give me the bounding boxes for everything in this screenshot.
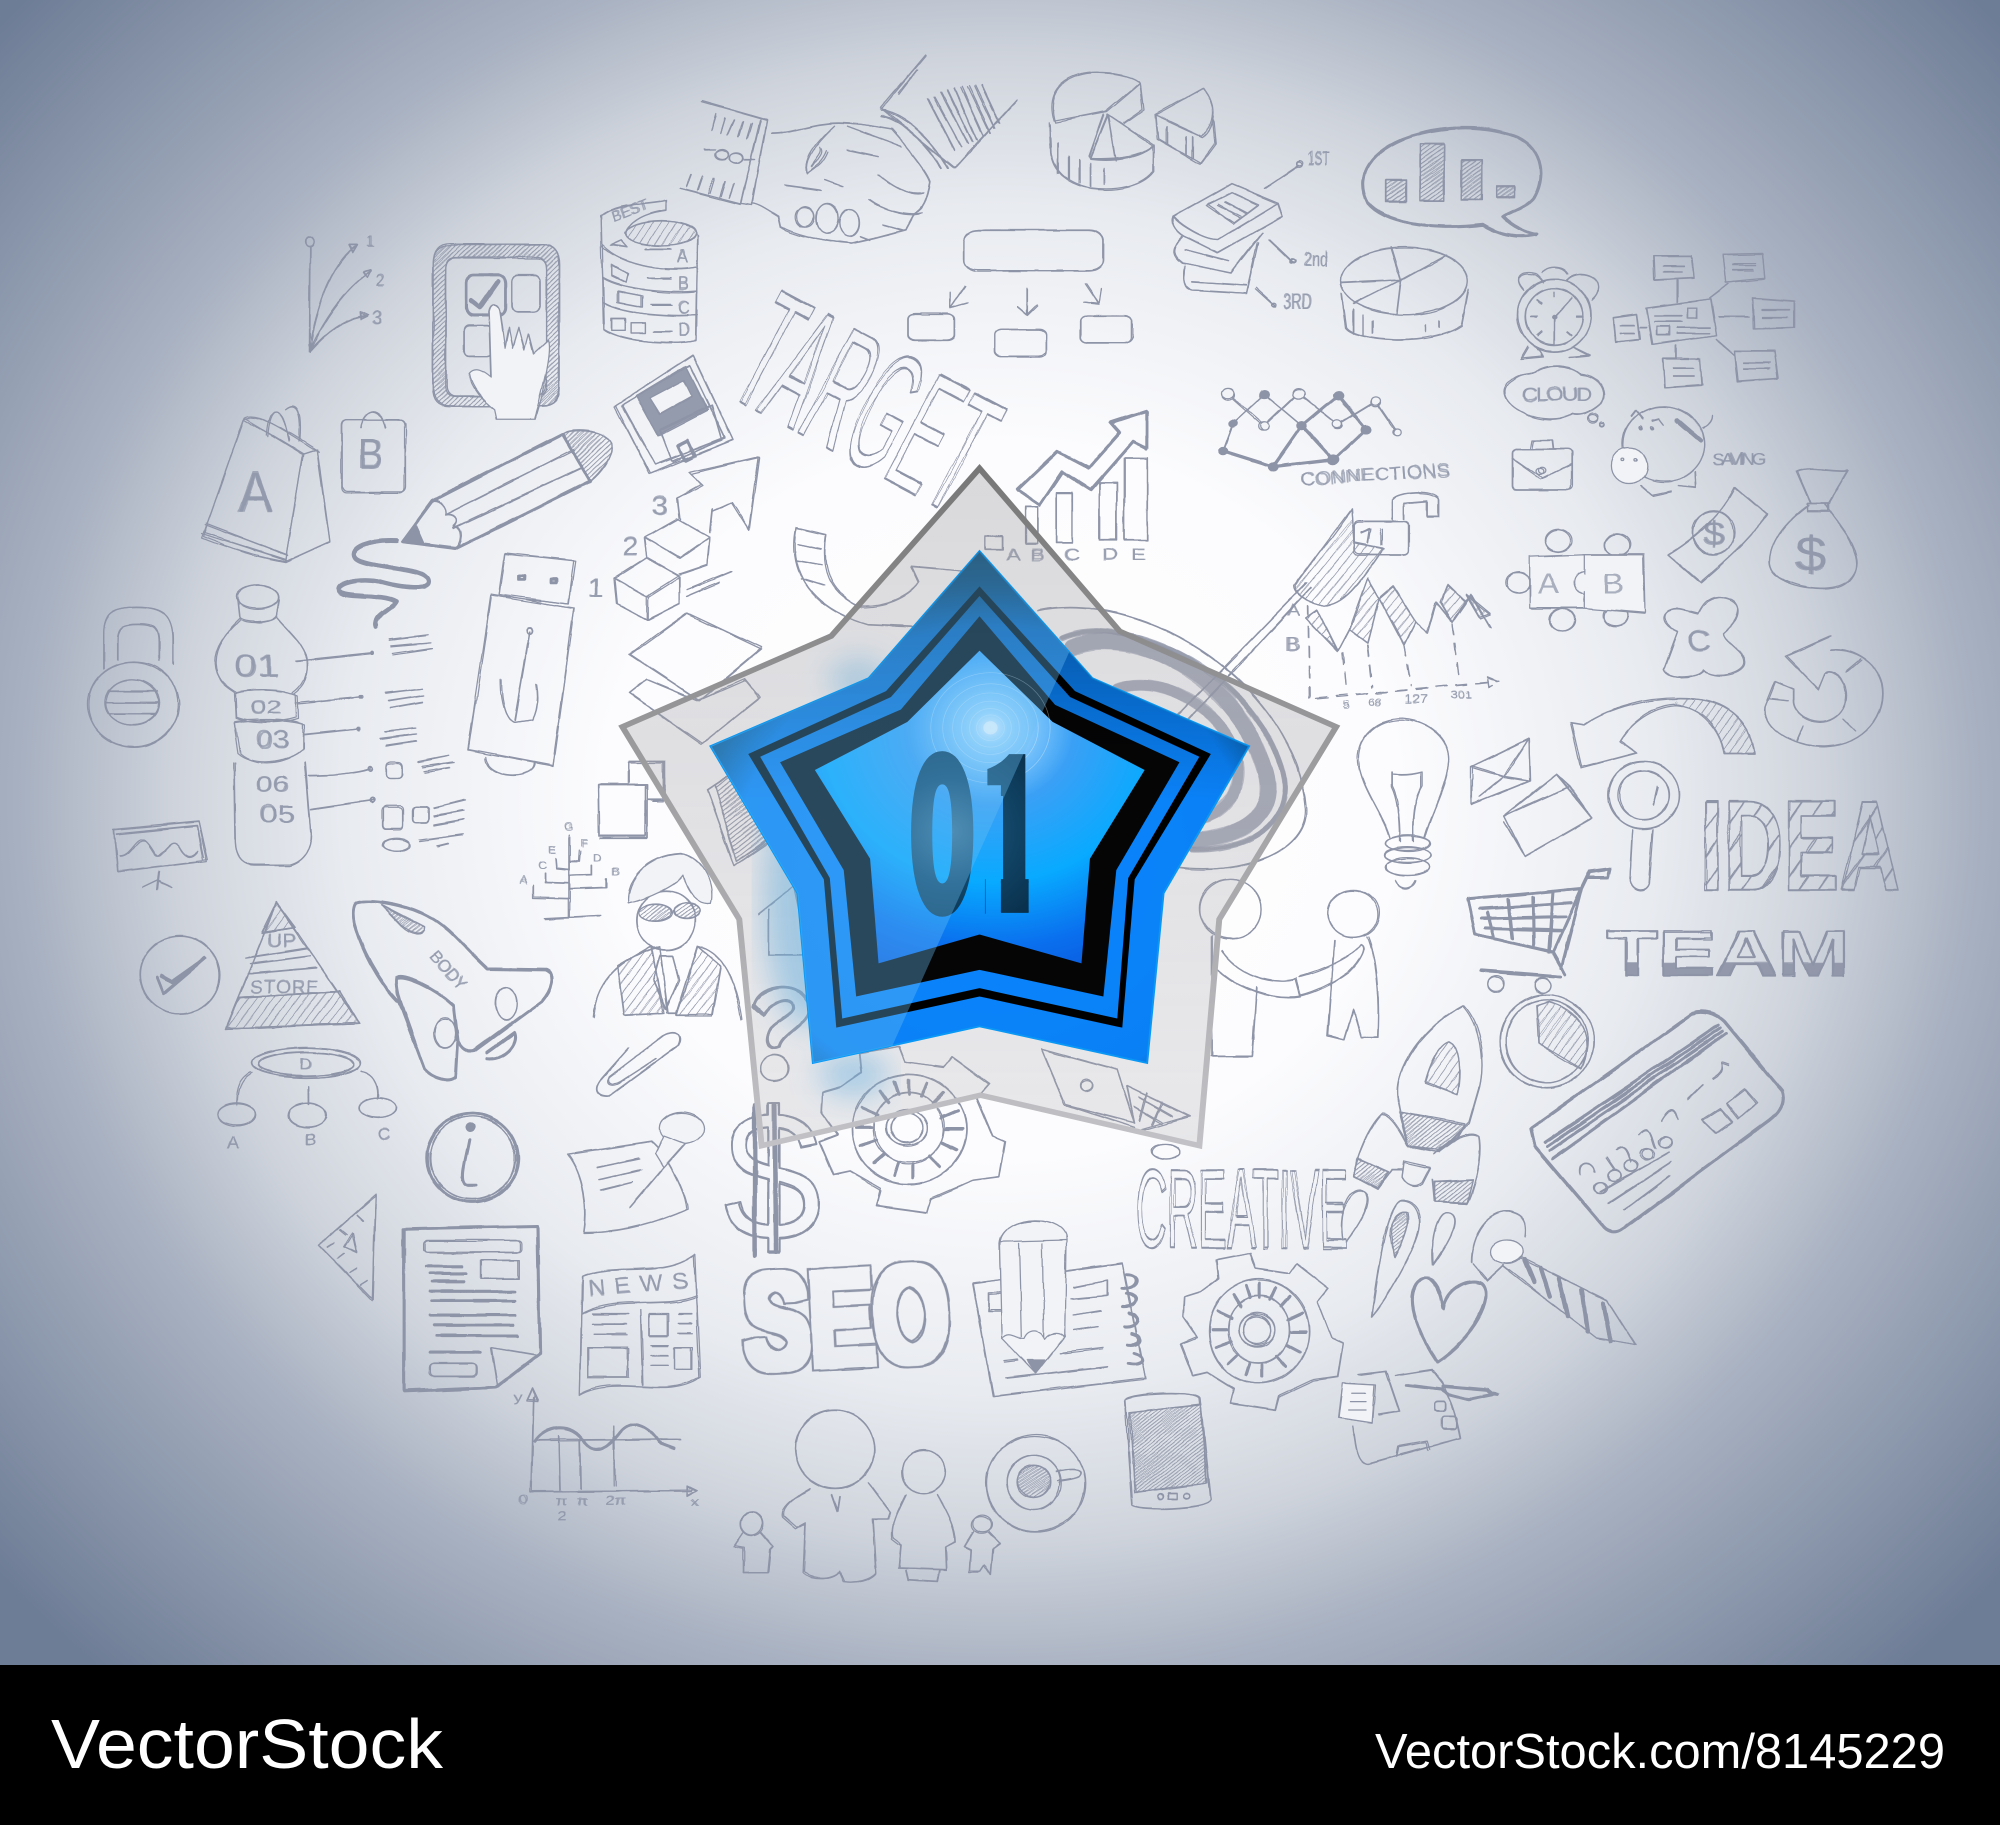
chart: connections network — [1219, 389, 1452, 490]
icon: branching arrows 1 2 3: 1 — [367, 232, 375, 251]
chart: area lines with axis: 127 — [1404, 692, 1427, 706]
star top shading — [710, 551, 1249, 780]
doodles traced lower middle — [513, 1105, 1145, 1582]
icon: envelopes — [1471, 738, 1592, 857]
chart: rising arrow with bars: C — [1064, 546, 1080, 564]
icon: dollar bill — [1668, 487, 1767, 582]
icon: best database list — [601, 195, 698, 343]
chart: sine graph: π — [576, 1494, 588, 1508]
diagram: node D with A B C — [218, 1048, 397, 1153]
icon: stair steps with arrow: 2 — [622, 532, 638, 561]
diagram: node D with A B C: B — [304, 1130, 317, 1150]
icon: puzzle pieces: A — [1538, 568, 1560, 600]
icon: best database list: A — [677, 246, 688, 267]
icon: smartphone — [1125, 1393, 1211, 1509]
icon: rocket — [1353, 1006, 1482, 1203]
icon: ribbon arrow — [795, 528, 966, 627]
chart: connections network: CONNECTIONS — [1300, 461, 1452, 490]
icon: shopping bag B: B — [358, 432, 383, 478]
icon: presentation board — [114, 821, 207, 890]
icon: money bag — [1769, 469, 1857, 589]
chart: flow boxes with arrows — [908, 230, 1132, 357]
icon: cloud — [1505, 366, 1604, 427]
diagram: letter tree — [520, 821, 620, 919]
heading: IDEA: IDEA — [1700, 775, 1900, 918]
chart: rising arrow with bars: A — [1006, 546, 1022, 564]
chart: sine graph: 2π — [605, 1494, 626, 1508]
icon: piggy bank — [1612, 406, 1767, 495]
chart: rising arrow with bars — [986, 412, 1147, 564]
icon: alarm clock — [1518, 268, 1599, 359]
icon: small squares behind star — [600, 762, 665, 838]
icon: stack of books with rankings — [1173, 147, 1330, 314]
icon: store pyramid — [225, 902, 359, 1029]
icon: notes and pen folder — [1339, 1369, 1497, 1464]
icon: info circle — [427, 1114, 518, 1202]
icon: branching arrows 1 2 3 — [305, 232, 385, 352]
icon: stair steps with arrow — [588, 457, 759, 620]
icon: puzzle pieces: B — [1602, 568, 1624, 600]
icon: space shuttle: BODY — [425, 946, 472, 994]
icon: stair steps with arrow: 3 — [652, 490, 668, 520]
icon: shopping bag B — [342, 412, 405, 492]
icon: floppy disk — [615, 355, 733, 474]
icon: shopping bag A: A — [238, 460, 273, 525]
black star band — [780, 616, 1179, 996]
icon: flat pie chart — [1341, 247, 1469, 340]
icon: handshake person right — [1300, 890, 1378, 1039]
icon: usb drive — [468, 554, 574, 775]
chart: sine graph: y — [513, 1391, 522, 1405]
chart: sine graph: 2 — [557, 1509, 567, 1523]
footer brand: VectorStock — [51, 1705, 444, 1783]
heading: TEAM: TEAM — [1606, 917, 1849, 990]
chart: rising arrow with bars: E — [1131, 546, 1146, 564]
icon: arrow fletching and open lock — [1294, 493, 1439, 606]
icon: pencil — [402, 431, 612, 548]
icon: space shuttle — [354, 901, 552, 1080]
diagram: letter tree: C — [539, 860, 547, 872]
icon: floppy behind star — [707, 771, 772, 866]
icon: stack of books with rankings: 3RD — [1284, 289, 1312, 314]
icon: magnifier — [1608, 761, 1679, 890]
hand drawn doodles layer: CREATIVE — [1136, 1146, 1348, 1272]
central star badge: 01 — [907, 663, 1047, 974]
icon: puzzle pieces — [1506, 530, 1645, 631]
central star badge — [622, 468, 1336, 1146]
icon: newspaper — [580, 1255, 700, 1395]
icon: dollar bars — [755, 1105, 776, 1256]
icon: best database list: B — [678, 272, 689, 294]
diagram: letter tree: G — [564, 821, 573, 833]
diagram: letter tree: D — [593, 853, 602, 864]
blue star body — [710, 551, 1249, 1063]
doodles traced lower left — [140, 821, 742, 1395]
icon: triangle ruler — [319, 1195, 376, 1300]
icon: small squares — [598, 762, 663, 836]
icon: family of people — [734, 1410, 1000, 1582]
icon: mouse — [1152, 1144, 1180, 1159]
icon: flame drops — [1342, 1190, 1455, 1317]
icon: money bag: $ — [1795, 527, 1827, 582]
icon: laptop — [1042, 1049, 1189, 1130]
icon: numbered bottle: 01 — [234, 649, 280, 684]
doodles traced upper middle — [680, 55, 1330, 564]
diagram: node D with A B C: C — [377, 1125, 390, 1144]
icon: best database list: C — [678, 297, 690, 318]
chart: sine graph: x — [691, 1496, 700, 1510]
icon: squiggle line — [339, 540, 428, 626]
icon: light bulb — [1358, 719, 1449, 889]
icon: check circle — [140, 936, 220, 1014]
chart: area lines with axis: B — [1285, 634, 1300, 655]
hand drawn doodles layer: 1ST — [1308, 147, 1330, 170]
chart: area lines with axis: A — [1287, 601, 1300, 620]
icon: coffee cup — [987, 1435, 1085, 1532]
diagram: node D with A B C: A — [227, 1133, 239, 1153]
heading: SEO: SEO — [741, 1236, 952, 1399]
chart: sine graph: 0 — [519, 1493, 529, 1507]
glass glow behind star — [764, 657, 888, 1097]
icon: numbered bottle: 03 — [256, 727, 290, 755]
icon: document page — [404, 1226, 540, 1391]
icon: numbered bottle: 05 — [260, 802, 295, 829]
icon: cloud: CLOUD — [1522, 385, 1591, 406]
chart: rising arrow with bars: B — [1031, 546, 1045, 564]
icon: branching arrows 1 2 3: 3 — [373, 306, 383, 329]
icon: speech bubble with bars — [1363, 128, 1540, 236]
icon: puzzle piece C — [1664, 597, 1744, 677]
doodles behind the star — [588, 457, 1311, 1130]
icon: tablet touch hand — [433, 245, 559, 419]
icon: credit card — [1531, 1012, 1783, 1232]
hand drawn doodles layer — [88, 55, 1900, 1582]
chart: sine graph — [513, 1388, 700, 1523]
icon: stair steps with arrow: 1 — [588, 573, 604, 603]
icon: stack of books with rankings: 2nd — [1304, 249, 1328, 272]
icon: bullseye scribble — [1038, 583, 1311, 870]
chart: rising arrow with bars: D — [1102, 546, 1118, 564]
icon: piggy bank: SAVING — [1712, 450, 1767, 468]
doodles traced upper right — [1219, 128, 1857, 712]
hand drawn doodles layer: TARGET — [708, 257, 1026, 548]
icon: gear behind star — [819, 1046, 1005, 1212]
icon: numbered bottle: 06 — [256, 772, 290, 797]
icon: bottle callout lines — [297, 635, 466, 851]
diagram: network of cards — [1613, 253, 1795, 388]
doodles traced upper left — [88, 195, 698, 890]
icon: paper sheets — [630, 613, 762, 744]
icon: shopping cart — [1468, 869, 1610, 993]
icon: store pyramid: UP — [268, 931, 297, 952]
icon: dollar bill: $ — [1703, 514, 1725, 552]
doodles traced right — [1300, 636, 1883, 1232]
chart: area lines with axis: 5 — [1342, 700, 1350, 712]
diagram: letter tree: B — [611, 866, 620, 878]
black line ring — [748, 586, 1211, 1028]
diagram: node D with A B C: D — [300, 1055, 312, 1073]
icon: 3d pie chart with slice — [1049, 72, 1216, 189]
icon: handshake person left — [1200, 879, 1301, 1056]
icon: padlock — [88, 607, 179, 747]
icon: dollar sign: $ — [724, 1074, 822, 1280]
outer glass star — [622, 468, 1336, 1146]
icon: handshake — [680, 55, 1017, 243]
chart: sine graph: π — [555, 1494, 567, 1508]
icon: gear lower right — [1180, 1253, 1343, 1410]
icon: heart — [1413, 1279, 1486, 1362]
icon: briefcase — [1512, 440, 1572, 490]
icon: shopping bag A — [203, 407, 330, 562]
icon: best database list: BEST — [610, 195, 650, 226]
footer image id: VectorStock.com/8145229 — [1375, 1725, 1945, 1779]
second blue band — [760, 596, 1199, 1018]
footer bar — [0, 1665, 2000, 1825]
chart: area lines with axis — [1285, 578, 1498, 712]
diagram: letter tree: A — [520, 875, 528, 887]
icon: house — [759, 886, 804, 955]
glass reflection — [699, 542, 1078, 1065]
icon: pinned note — [568, 1112, 704, 1233]
icon: newspaper: NEWS — [586, 1269, 689, 1302]
icon: store pyramid: STORE — [249, 977, 319, 998]
diagram: letter tree: E — [548, 845, 557, 856]
icon: agent with sunglasses — [593, 853, 742, 1019]
icon: small pie clock — [1500, 995, 1594, 1088]
ripple highlight — [931, 673, 1050, 783]
icon: notebook with pencil — [973, 1220, 1145, 1397]
doodles traced lower right — [1125, 1144, 1636, 1509]
chart: area lines with axis: 68 — [1368, 697, 1381, 709]
icon: puzzle piece C: C — [1687, 625, 1711, 657]
icon: branching arrows 1 2 3: 2 — [377, 270, 385, 289]
icon: question mark — [754, 988, 809, 1080]
inner blue star — [815, 651, 1145, 963]
icon: circular arrow — [1765, 636, 1883, 747]
icon: large curved arrow — [1571, 698, 1755, 767]
icon: numbered bottle: 02 — [250, 696, 282, 718]
icon: best database list: D — [678, 319, 690, 340]
icon: numbered bottle — [215, 586, 311, 865]
icon: striped tie — [1471, 1212, 1636, 1345]
chart: area lines with axis: 301 — [1450, 688, 1472, 701]
diagram: letter tree: F — [581, 838, 588, 850]
icon: paperclip — [597, 1033, 681, 1096]
